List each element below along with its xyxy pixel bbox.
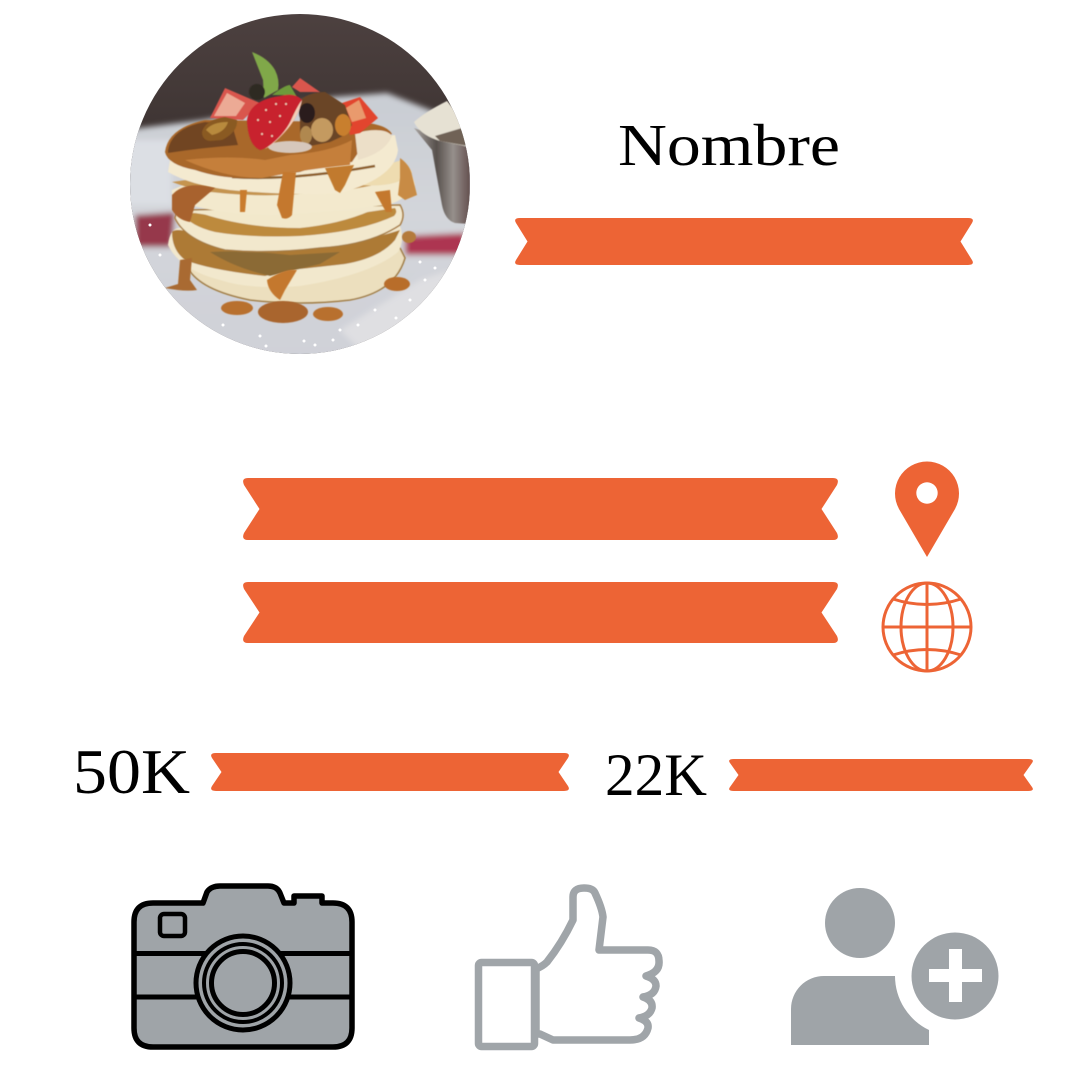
photo: pancake stack (125, 10, 480, 360)
icon: thumbs up (478, 888, 659, 1046)
icon: camera (134, 886, 352, 1047)
stat: 22K: 22K (605, 742, 707, 808)
sugar dots (148, 224, 436, 348)
heading: Nombre: Nombre (618, 112, 840, 178)
toppings (202, 52, 378, 153)
pancakes (165, 120, 415, 303)
caramel drips (165, 158, 417, 323)
ribbon: website (243, 582, 838, 643)
ribbon: name (515, 218, 973, 265)
icon: add user (791, 888, 998, 1045)
icon: location pin (895, 462, 959, 557)
stat: 50K: 50K (73, 736, 190, 807)
ribbon: location (243, 478, 838, 540)
icon: globe (883, 583, 971, 671)
bowl (414, 101, 470, 224)
ribbon: stat 50K (211, 753, 569, 791)
ribbon: stat 22K (729, 759, 1033, 791)
